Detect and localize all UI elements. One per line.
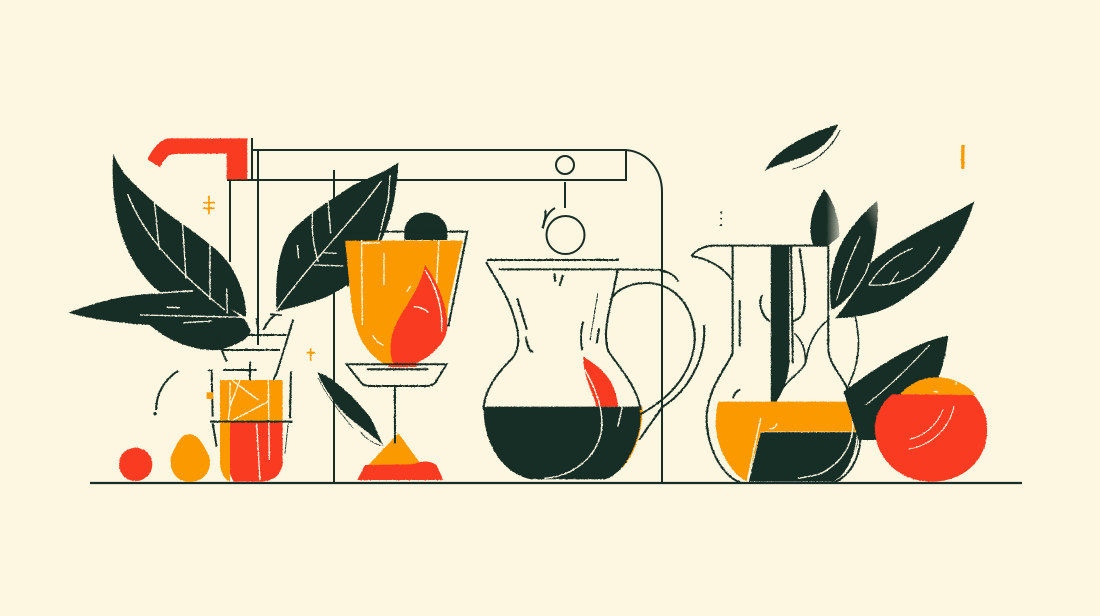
curved accent stroke bbox=[153, 371, 178, 416]
lower right leaf bbox=[843, 336, 948, 440]
orange pear bbox=[171, 434, 210, 482]
saucer and stem bbox=[347, 364, 447, 443]
big upper leaf bbox=[113, 153, 246, 323]
funnel lines bbox=[217, 314, 293, 380]
red tap bbox=[147, 138, 247, 179]
back tip leaf bbox=[810, 189, 839, 245]
frame lines bbox=[227, 138, 662, 483]
dots bbox=[718, 212, 724, 226]
small falling leaf bbox=[317, 372, 383, 446]
left section bbox=[68, 138, 467, 482]
horizontal leaf bbox=[68, 292, 251, 350]
right section bbox=[484, 124, 987, 483]
orange division mark bbox=[307, 348, 315, 361]
small cup bbox=[207, 370, 293, 482]
red fruit small bbox=[119, 448, 152, 481]
black ball bbox=[404, 212, 447, 240]
pile bbox=[357, 423, 443, 480]
big right leaf bbox=[830, 202, 974, 318]
pitcher bbox=[484, 210, 704, 479]
large red fruit bbox=[875, 377, 987, 482]
right leaf bbox=[276, 162, 398, 312]
middle leaf bbox=[830, 201, 878, 310]
jug bbox=[691, 246, 861, 483]
ground line bbox=[90, 482, 1022, 484]
cocktail glass bbox=[343, 232, 467, 365]
orange plus mark bbox=[203, 196, 215, 214]
falling leaf top bbox=[765, 124, 840, 171]
orange bar bbox=[958, 145, 968, 169]
